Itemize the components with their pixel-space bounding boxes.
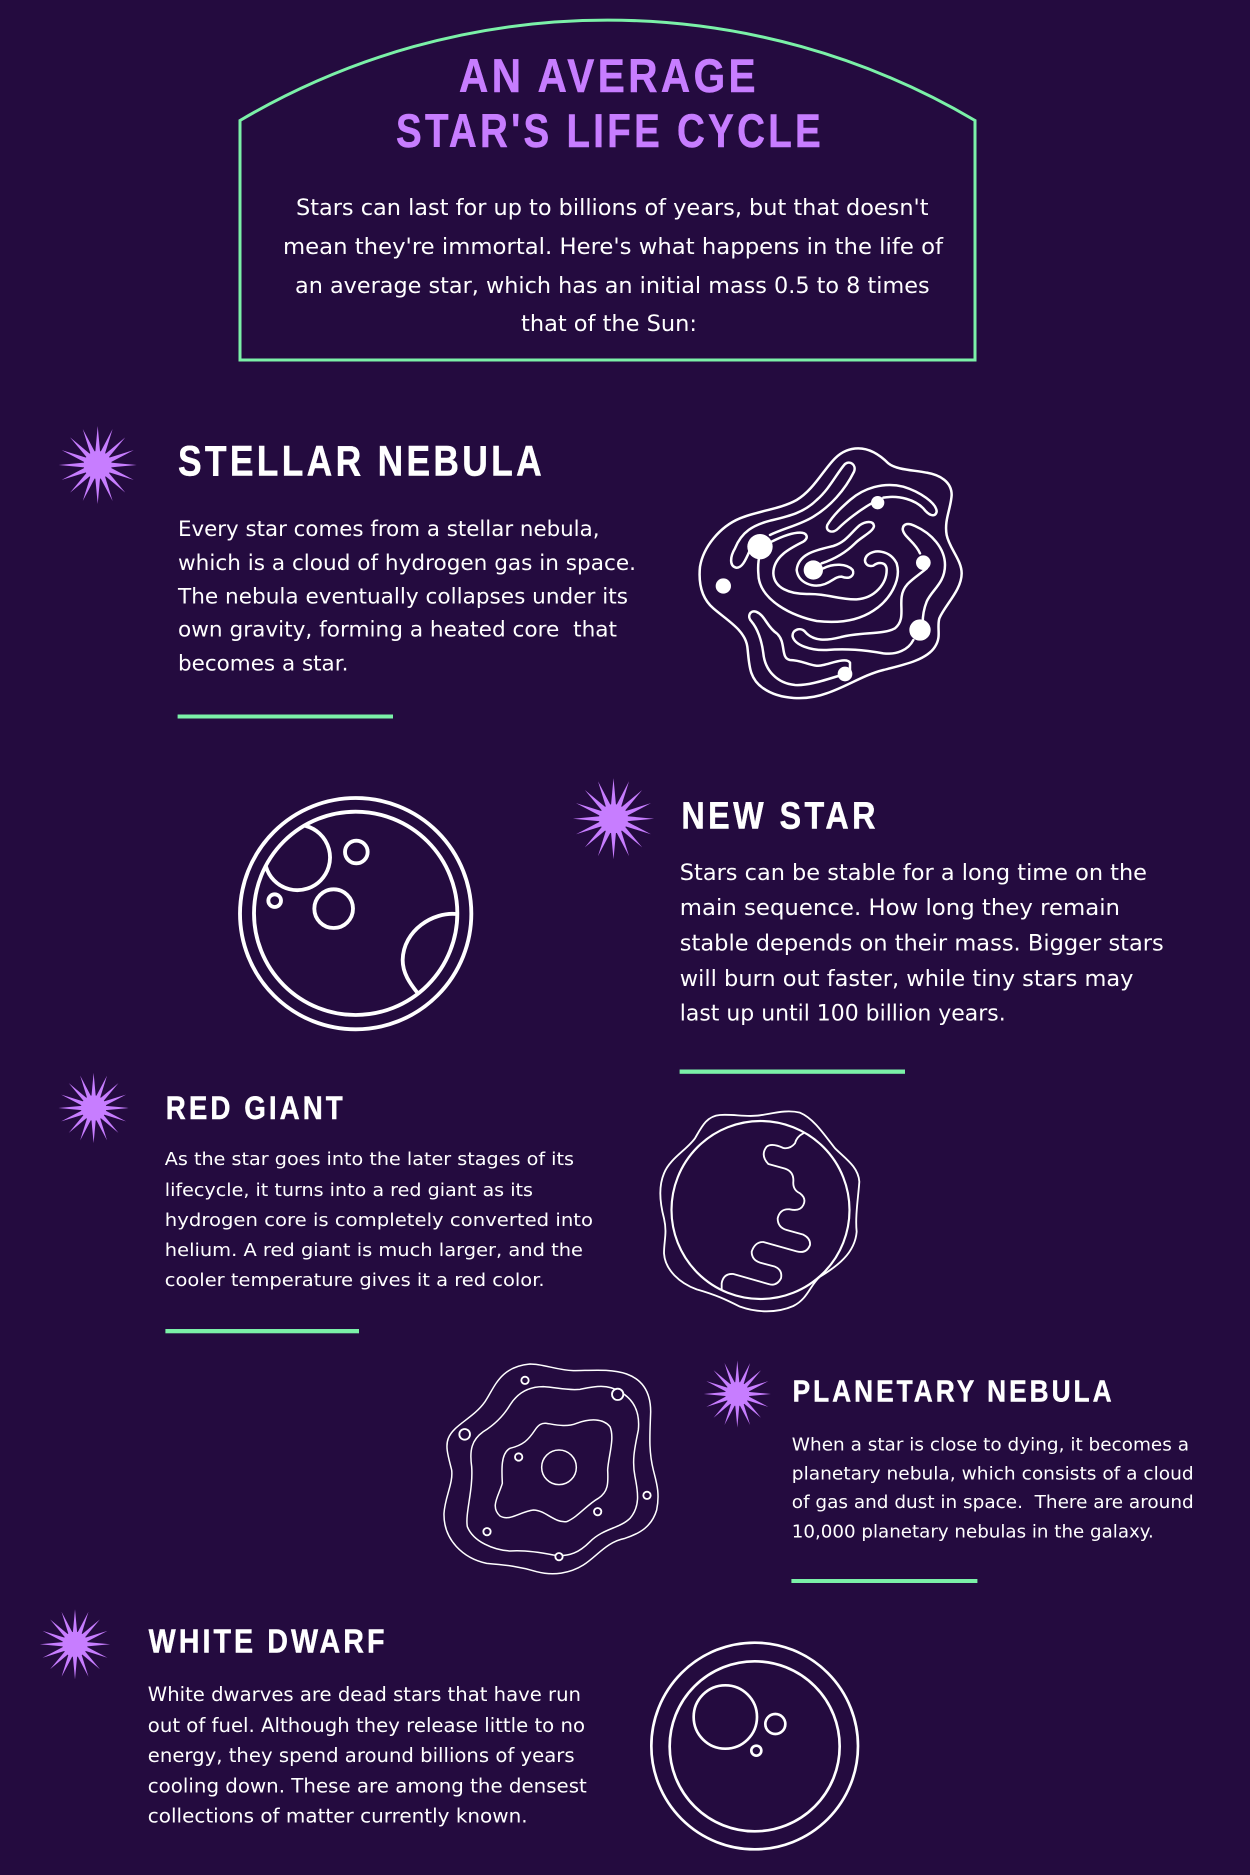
intro text <box>283 196 944 337</box>
panel: new star <box>240 778 1164 1074</box>
text: planetary nebula description: planetary nebula, which consists of a cloud <box>792 1464 1194 1484</box>
text: white dwarf description <box>148 1683 587 1828</box>
green rule <box>791 1579 977 1583</box>
icon: red giant <box>660 1111 859 1311</box>
text: new star description: stable depends on their mass. Bigger stars <box>680 932 1164 957</box>
icon: star burst <box>59 426 137 504</box>
text: new star description <box>680 861 1164 1027</box>
intro text: Stars can last for up to billions of years, but that doesn't <box>296 196 929 221</box>
intro text: mean they're immortal. Here's what happens in the life of <box>283 235 944 260</box>
text: new star description: main sequence. How long they remain <box>680 896 1120 921</box>
icon: new star cratered planet <box>240 798 471 1029</box>
text: red giant description: helium. A red giant is much larger, and the <box>165 1240 583 1261</box>
text: red giant description: cooler temperature gives it a red color. <box>165 1270 545 1291</box>
text: new star description: will burn out faster, while tiny stars may <box>680 967 1134 992</box>
green rule <box>680 1070 905 1074</box>
text: white dwarf description: energy, they spend around billions of years <box>148 1744 575 1767</box>
text: white dwarf description: out of fuel. Although they release little to no <box>148 1714 585 1737</box>
text: white dwarf description: cooling down. These are among the densest <box>148 1775 587 1798</box>
intro text: an average star, which has an initial mass 0.5 to 8 times <box>295 274 930 299</box>
arched frame <box>240 20 975 360</box>
text: stellar nebula description: which is a cloud of hydrogen gas in space. <box>178 551 636 575</box>
text: red giant description: hydrogen core is completely converted into <box>165 1210 593 1231</box>
icon: stellar nebula swirl <box>700 448 962 698</box>
text: stellar nebula description: own gravity, forming a heated core that <box>178 618 617 642</box>
panel: introduction <box>240 20 975 360</box>
icon: star burst <box>573 778 654 859</box>
text: stellar nebula description: The nebula eventually collapses under its <box>177 584 628 608</box>
icon: white dwarf <box>651 1643 858 1849</box>
heading: planetary nebula: PLANETARY NEBULA <box>793 1374 1115 1409</box>
panel: white dwarf <box>40 1609 858 1849</box>
text: planetary nebula description: When a star is close to dying, it becomes a <box>792 1436 1189 1456</box>
panel: planetary nebula <box>444 1360 1194 1583</box>
heading: white dwarf: WHITE DWARF <box>149 1623 388 1660</box>
green rule <box>178 714 393 718</box>
text: white dwarf description: collections of matter currently known. <box>148 1805 528 1828</box>
text: planetary nebula description <box>792 1436 1194 1542</box>
green rule <box>165 1329 359 1333</box>
title <box>396 49 824 157</box>
text: red giant description <box>165 1149 593 1291</box>
text: stellar nebula description: becomes a star. <box>178 652 348 676</box>
icon: star burst <box>704 1360 771 1428</box>
text: red giant description: lifecycle, it turns into a red giant as its <box>165 1180 533 1201</box>
text: stellar nebula description <box>177 517 636 676</box>
title: AN AVERAGE <box>459 49 759 102</box>
text: white dwarf description: White dwarves are dead stars that have run <box>148 1683 581 1706</box>
panel: red giant <box>58 1073 859 1333</box>
text: red giant description: As the star goes into the later stages of its <box>165 1149 574 1170</box>
text: new star description: last up until 100 billion years. <box>680 1002 1006 1027</box>
heading: red giant: RED GIANT <box>166 1090 346 1126</box>
title: STAR'S LIFE CYCLE <box>396 104 824 157</box>
text: stellar nebula description: Every star comes from a stellar nebula, <box>178 517 600 541</box>
heading: new star: NEW STAR <box>681 795 879 837</box>
icon: star burst <box>58 1073 129 1143</box>
text: new star description: Stars can be stable for a long time on the <box>680 861 1147 886</box>
heading: stellar nebula: STELLAR NEBULA <box>178 438 545 486</box>
text: planetary nebula description: 10,000 planetary nebulas in the galaxy. <box>792 1522 1154 1542</box>
icon: star burst <box>40 1609 110 1679</box>
intro text: that of the Sun: <box>521 312 697 337</box>
icon: planetary nebula rings <box>444 1364 658 1574</box>
text: planetary nebula description: of gas and dust in space. There are around <box>792 1493 1194 1513</box>
panel: stellar nebula <box>59 426 962 718</box>
